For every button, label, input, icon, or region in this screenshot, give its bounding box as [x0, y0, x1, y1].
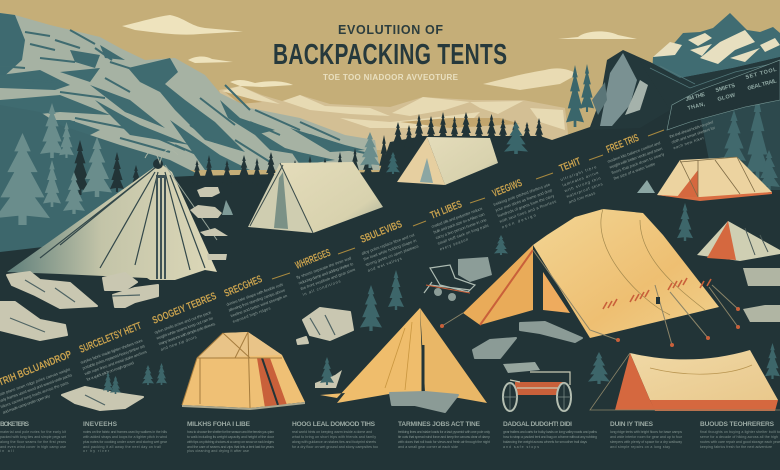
column 1: BOKE TERS	[0, 421, 30, 428]
milestone 7: carry a two person home in one	[435, 217, 488, 240]
milestone 1	[0, 348, 78, 415]
milestone 2: surplus fabric made lighter shelters more	[80, 337, 144, 365]
milestone 11: the trail ahead holds recycled	[669, 119, 714, 139]
rocks and stones	[0, 268, 780, 412]
bike trailer	[503, 362, 571, 411]
milestone 10: floors that pack down to nearly	[611, 151, 665, 175]
milestone 2: SURCELETSY HETT	[78, 320, 144, 356]
milestone 5: WHRREGES	[294, 247, 332, 272]
milestone 8: hundreds of grams from the carry	[497, 193, 555, 218]
milestone 9: and low mass	[568, 190, 596, 204]
column 4: what to bring on short trips with friends and family	[292, 435, 376, 439]
milestone 1: and made camp under open sky	[2, 393, 50, 415]
column 8: BUOUDS TEOHRERERS	[700, 421, 775, 428]
column 5: trekking lines and stake loads for a taut pyramid with one pole only	[398, 430, 490, 434]
column 5: tie outs that spread wind force and keep the canvas clear of damp	[398, 435, 490, 439]
bottom columns	[0, 421, 780, 453]
milestone 8: trekking pole pitched shelters use	[493, 181, 551, 207]
milestone 2: portable poles replaced heavy timber set	[82, 343, 146, 371]
milestone 4: SRECGHES	[222, 273, 264, 300]
milestone 7	[429, 198, 492, 251]
milestone 8: your own sticks as frame and drop	[495, 187, 553, 213]
milestone 3	[151, 290, 218, 352]
column 6: how to strap a packed tent and bag on a frame without any rubbing	[503, 435, 597, 439]
orange tipi tent	[320, 308, 487, 403]
milestone 3: and new zip doors	[160, 334, 197, 352]
timeline: slanted headings and text	[0, 119, 718, 415]
column 1	[0, 421, 66, 453]
milestone 9: ultralight fibre	[560, 164, 598, 182]
ridge tent, sand	[397, 137, 498, 185]
column 2	[83, 421, 168, 453]
milestone 10	[605, 130, 667, 181]
column 8	[700, 421, 780, 449]
rock cliff	[590, 50, 690, 130]
column 8: routes with care repair and good storage each year	[700, 440, 780, 444]
column 4: real world hints on keeping warm inside a dome and	[292, 430, 372, 434]
column 4: HOOG LEAL DOMOOD TIHS	[292, 421, 376, 428]
milestone 2	[78, 320, 150, 382]
milestone 6: SBULEVIBS	[359, 218, 404, 246]
milestone 6: strong gusts on open plateaus	[365, 243, 419, 267]
right small tent	[697, 221, 780, 261]
column 5	[398, 421, 490, 449]
milestone 4: allowing free standing camps above	[228, 287, 286, 313]
small distant tent	[637, 180, 655, 193]
column 3	[187, 421, 275, 453]
sign panel, top right: JIM THE	[685, 92, 706, 103]
title line one: EVOLUTIION OF	[338, 23, 443, 37]
milestone 5: in all conditions	[302, 278, 341, 297]
subtitle: TOE TOO NIADOOR AVVEOTURE	[323, 73, 459, 82]
column 3: plus cleaning and drying it after use	[187, 449, 249, 453]
dome tent, yellow	[182, 332, 305, 410]
milestone 5: fly sheets separate the inner wall	[296, 255, 352, 280]
milestone 2: for a quick pitch on rough ground	[86, 360, 134, 382]
sign panel, top right: SET TOOL	[745, 67, 778, 81]
column 7: DUIN IY TINES	[610, 421, 654, 428]
milestone 10: FREE TRIS	[605, 132, 641, 156]
milestone 5	[294, 247, 359, 297]
milestone 10: modern kits balance comfort and	[607, 140, 661, 164]
camp stones beside tipi	[190, 187, 233, 260]
right blue mountain	[650, 13, 780, 110]
column 1: in all	[0, 449, 14, 453]
column 7: and simple repairs on a long stay	[610, 445, 670, 449]
column 3: with tips on pitching choices at a camp on snow or rock ledges	[187, 440, 274, 444]
left teal forest backdrop	[0, 105, 200, 255]
milestone 5: reducing damp and adding shelter to	[298, 261, 355, 286]
milestone 3: many seasons with simple pole sleeves	[158, 321, 216, 346]
milestone 4: treeline and better wind strength on	[230, 293, 288, 318]
milestone 8: VEEGIWS	[491, 177, 524, 200]
column 1: and even wind cover in high camp use	[0, 445, 66, 449]
column 7: and wide interior room for gear and up to four	[610, 435, 683, 439]
milestone 4: exposed high ridges	[232, 305, 271, 324]
column 5: TARMINES JOBS ACT TINE	[398, 421, 481, 428]
sign panel, top right: GEAL TRAIL	[747, 78, 778, 92]
title block	[273, 23, 507, 82]
clouds	[122, 15, 637, 90]
left mountain	[0, 13, 380, 170]
column 2: and packing it all away the next day on trail	[83, 445, 161, 449]
milestone 8	[491, 173, 560, 229]
milestone 4	[222, 273, 291, 324]
milestone 7: small stuff sack on long trails	[437, 223, 489, 246]
column 3: MILKHS FOHA I LIBE	[187, 421, 251, 428]
column 2: plus notes for cooking under cover and storing wet gear	[83, 440, 168, 444]
milestone 7: every season	[439, 237, 469, 251]
ridge tent, white	[248, 162, 383, 233]
milestone 7: TH LIBES	[429, 198, 464, 222]
column 3: how to choose the shelter for the season and the terrain you plan	[187, 430, 274, 434]
column 2: INEVEEHS	[83, 421, 118, 428]
milestone 9: waterproof skins	[566, 181, 603, 199]
main title: BACKPACKING TENTS	[273, 39, 507, 71]
milestone 4: domes take shape with flexible rods	[226, 282, 284, 307]
mountain shadows	[0, 45, 365, 170]
column 6: balancing the weight across wheels for smoother trail days	[503, 440, 587, 444]
guy lines and pegs	[442, 250, 738, 345]
milestone 8: open design	[501, 212, 536, 229]
column 8: keeping fabrics fresh for the next adventure	[700, 445, 772, 449]
pines, left foreground	[0, 103, 380, 225]
milestone 11: each new hiker	[673, 135, 705, 150]
milestone 3: SOOGEIY TEBRES	[151, 290, 218, 327]
column 2: notes on the fabric and frames used by walkers in the hills	[83, 430, 167, 434]
column 8: serve for a decade of hiking across all the high	[700, 435, 778, 439]
milestone 9: laminates arrive	[562, 170, 600, 188]
dome tent, cream and orange, right	[657, 157, 772, 201]
column 2: or by river	[83, 449, 110, 453]
tree lines	[70, 112, 544, 195]
ridge tent, orange front	[590, 350, 780, 411]
milestone 9	[558, 155, 606, 204]
milestone 1: hikers carried long loads across the pass	[0, 380, 69, 409]
milestone 7: coated silk and polyester reduce	[431, 206, 484, 229]
column 4: for a dry floor on wet ground and stony campsites too	[292, 445, 378, 449]
tent reinforcing stripes	[603, 278, 711, 309]
column 7: sleepers with plenty of space for a dry walkway	[610, 440, 682, 444]
milestone 11	[669, 119, 718, 150]
tipi tent	[7, 150, 217, 280]
milestone 5: the front vestibule and gear store	[300, 266, 357, 291]
column 3: to walk including its weight capacity and height of the door	[187, 435, 275, 439]
milestone 6	[359, 218, 426, 273]
column 5: with doors that roll back for views and fresh air through the night	[398, 440, 490, 444]
milestone 3: nylon shells arrive and cut the pack	[154, 310, 212, 335]
column 6: and safe stops	[503, 445, 539, 449]
column 2: with added straps and loops for a tighter pitch in wind	[83, 435, 167, 439]
column 5: and a small gear corner at each side	[398, 445, 458, 449]
milestone 9: TEHIT	[558, 155, 583, 175]
column 1: material and pole notes for the early kit	[0, 430, 66, 434]
milestone 9: with strong thin	[564, 176, 601, 193]
gear cart, upper	[424, 257, 492, 301]
milestone 8: with taut lines and a floorless	[499, 199, 557, 224]
column 3: and the care of seams and zips that lets a tent last for years	[187, 445, 274, 449]
milestone 10: weight with better vents and sewn	[609, 146, 663, 170]
sign panel, top right	[667, 60, 780, 130]
sign panel, top right: SMIFTS	[715, 83, 736, 94]
milestone 6: alloy poles replace fibre and cut	[361, 232, 416, 256]
milestone 10: the size of a water bottle	[613, 161, 657, 181]
column 6: gear trailers and carts for bulky loads on long valley roads and paths	[503, 430, 597, 434]
column 6	[503, 421, 597, 449]
scattered pines	[103, 203, 780, 394]
mountain streaks	[0, 30, 375, 162]
sign panel, top right: THAN,	[687, 101, 706, 112]
right ridge and teal forest	[640, 57, 780, 190]
sign panel, top right: GLOW	[717, 92, 737, 103]
column 1: along the floor seams for the first years	[0, 440, 66, 444]
column 7	[610, 421, 683, 449]
large tent	[440, 209, 740, 347]
column 1: packed with long ties and simple pegs set	[0, 435, 66, 439]
milestone 7: bulk and pack size so a hiker can	[433, 211, 485, 235]
distant mountains	[219, 86, 570, 150]
pines, teal	[386, 64, 594, 174]
column 7: long ridge tents with bright floors for base camps	[610, 430, 682, 434]
column 4	[292, 421, 378, 449]
column 6: DADGAL DUDGHT! DIDI	[503, 421, 572, 428]
milestone 6: and wet valleys	[367, 256, 402, 273]
milestone 3: weight while seams keep out rain for	[156, 315, 214, 341]
milestone 2: with rope lines and metal stake anchors	[84, 349, 147, 376]
milestone 6: the load while holding shape in	[363, 238, 417, 262]
column 4: along with guidance on stakes ties and footprint sheets	[292, 440, 376, 444]
column 8: final thoughts on buying a lighter shelter built to	[700, 430, 780, 434]
milestone 11: cloth and smart shelters for	[671, 125, 716, 145]
